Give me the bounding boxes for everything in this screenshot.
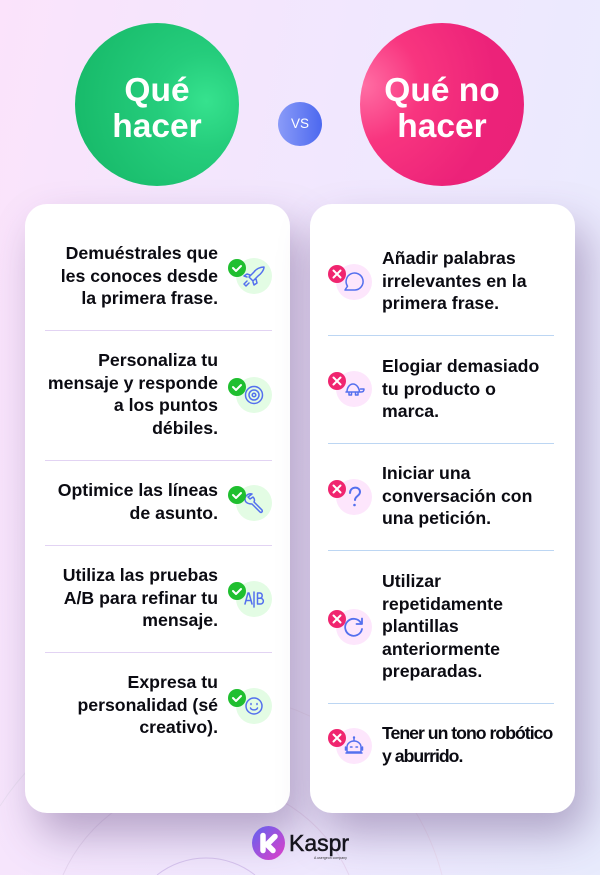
text: do 2 (48, 350, 218, 438)
vs badge (278, 102, 322, 146)
text: do 3: Optimice las líneas (58, 480, 218, 500)
vs badge: VS (291, 116, 309, 131)
text: do 3 (58, 480, 218, 522)
icon: question mark (328, 479, 372, 515)
text: dont 2: marca. (382, 401, 439, 421)
text: do 2: a los puntos (114, 395, 218, 415)
text: dont 1: primera frase. (382, 293, 499, 313)
text: do 5: Expresa tu (128, 672, 218, 692)
panel: qué no hacer (310, 204, 575, 813)
text: dont 3: Iniciar una (382, 463, 470, 483)
text: dont 4 (382, 571, 503, 681)
icon: smile (228, 688, 272, 724)
text: dont 3: conversación con (382, 486, 532, 506)
icon: refresh (328, 609, 372, 645)
text: do 4: mensaje. (142, 610, 218, 630)
text: do 2: mensaje y responde (48, 372, 218, 392)
text: do 2: Personaliza tu (98, 350, 218, 370)
icon: a/b (228, 581, 272, 617)
text: dont 2: Elogiar demasiado (382, 356, 539, 376)
text: dont 2: tu producto o (382, 378, 496, 398)
text: do 1 (61, 243, 218, 308)
text: do 4: A/B para refinar tu (64, 588, 218, 608)
text: dont 4: preparadas. (382, 661, 482, 681)
text: dont 4: anteriormente (382, 638, 500, 658)
icon: target (228, 377, 272, 413)
icon: speech bubble (328, 264, 372, 300)
text: dont 4: Utilizar (382, 571, 441, 591)
icon: turtle (328, 371, 372, 407)
text: dont 3 (382, 463, 532, 528)
text: do 5: personalidad (sé (77, 694, 218, 714)
text: do 2: débiles. (152, 418, 218, 438)
heading: Qué no hacer: hacer (397, 108, 487, 144)
text: dont 1: Añadir palabras (382, 248, 516, 268)
icon: robot (328, 728, 372, 764)
text: do 4: Utiliza las pruebas (63, 565, 218, 585)
text: do 3: de asunto. (130, 502, 218, 522)
text: dont 5: y aburrido. (382, 746, 462, 766)
heading: Qué no hacer (384, 72, 500, 144)
logo: Kaspr (252, 826, 349, 860)
text: do 5 (77, 672, 218, 737)
wordmark: Kaspr (289, 830, 349, 856)
text: do 1: la primera frase. (81, 288, 218, 308)
heading: Qué hacer: Qué (124, 72, 190, 109)
heading: Qué hacer (112, 72, 202, 144)
text: do 5: creativo). (139, 717, 218, 737)
logo mark (252, 826, 285, 860)
text: dont 5: Tener un tono robótico (382, 723, 552, 743)
text: dont 5 (382, 723, 553, 766)
text: do 1: les conoces desde (61, 266, 218, 286)
text: do 1: Demuéstrales que (66, 243, 218, 263)
text: dont 2 (382, 356, 539, 421)
icon: wrench (228, 485, 272, 521)
text: dont 3: una petición. (382, 508, 491, 528)
text: dont 4: plantillas (382, 616, 459, 636)
panel: qué hacer (25, 204, 290, 813)
text: do 4 (63, 565, 218, 630)
tagline: A usergeon company (314, 856, 347, 860)
text: dont 1: irrelevantes en la (382, 270, 527, 290)
circle: Qué no hacer (360, 23, 524, 186)
heading: Qué hacer: hacer (112, 108, 202, 144)
text: dont 1 (382, 248, 527, 313)
icon: rocket (228, 258, 272, 294)
circle: Qué hacer (75, 23, 239, 186)
heading: Qué no hacer: Qué no (384, 72, 500, 109)
text: dont 4: repetidamente (382, 594, 503, 614)
